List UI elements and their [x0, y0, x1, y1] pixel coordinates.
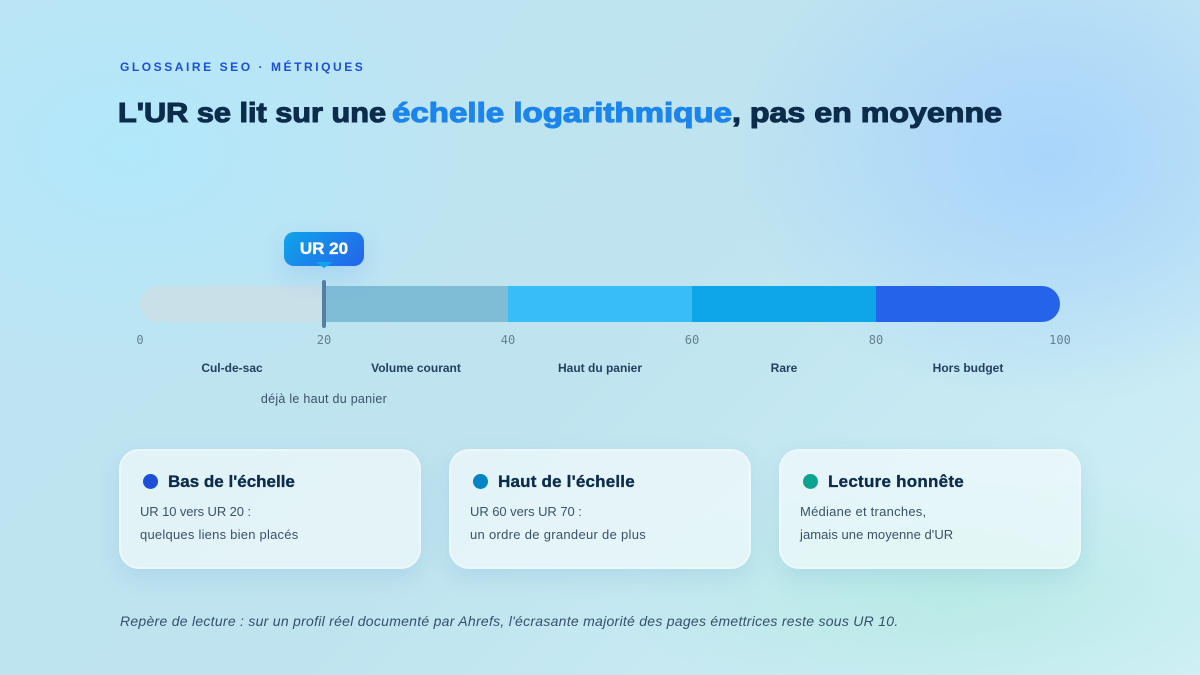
dot blue [143, 474, 158, 489]
card text: UR 10 vers UR 20 : [140, 504, 251, 519]
label Hors budget: Hors budget [933, 361, 1003, 375]
segment 20-40 [324, 286, 508, 322]
card heading: Bas de l'échelle [168, 472, 295, 491]
card text [470, 504, 646, 542]
footnote: Repère de lecture : sur un profil réel documenté par Ahrefs, l'écrasante majorité des pages émettrices reste sous UR 10. [120, 613, 898, 629]
marker line at UR 20 [322, 280, 326, 328]
card: Bas de l'échelle [119, 449, 421, 569]
label Cul-de-sac: Cul-de-sac [201, 361, 263, 375]
label Volume courant: Volume courant [371, 361, 461, 375]
tick 80: 80 [869, 333, 883, 347]
tick 40: 40 [501, 333, 515, 347]
title: L'UR se lit sur une [118, 97, 386, 128]
segment 80-100 [876, 286, 1060, 322]
card text: quelques liens bien placés [140, 526, 298, 542]
segment 40-60 [508, 286, 692, 322]
dot sky [473, 474, 488, 489]
marker pointer [315, 262, 333, 268]
card text [800, 504, 953, 542]
marker annotation: déjà le haut du panier [261, 392, 387, 406]
title [118, 97, 1002, 128]
marker badge UR 20: UR 20 [300, 239, 348, 258]
title: , pas en moyenne [732, 97, 1002, 128]
card text: UR 60 vers UR 70 : [470, 504, 582, 519]
label Haut du panier: Haut du panier [558, 361, 642, 375]
scale bar [140, 286, 1060, 322]
tick 100: 100 [1049, 333, 1071, 347]
card heading: Lecture honnête [828, 472, 964, 491]
card text: un ordre de grandeur de plus [470, 526, 646, 542]
segment 60-80 [692, 286, 876, 322]
segment 0-20 [140, 286, 324, 322]
card: Lecture honnête [779, 449, 1081, 569]
dot teal [803, 474, 818, 489]
tick 20: 20 [317, 333, 331, 347]
eyebrow label: GLOSSAIRE SEO · MÉTRIQUES [120, 60, 365, 74]
tick 0: 0 [136, 333, 144, 347]
card text [140, 504, 298, 542]
card text: Médiane et tranches, [800, 504, 926, 519]
title: échelle logarithmique [392, 97, 732, 128]
card: Haut de l'échelle [449, 449, 751, 569]
card heading: Haut de l'échelle [498, 472, 635, 491]
card text: jamais une moyenne d'UR [800, 526, 953, 542]
tick 60: 60 [685, 333, 699, 347]
label Rare: Rare [771, 361, 797, 375]
marker badge UR 20 [284, 232, 364, 266]
